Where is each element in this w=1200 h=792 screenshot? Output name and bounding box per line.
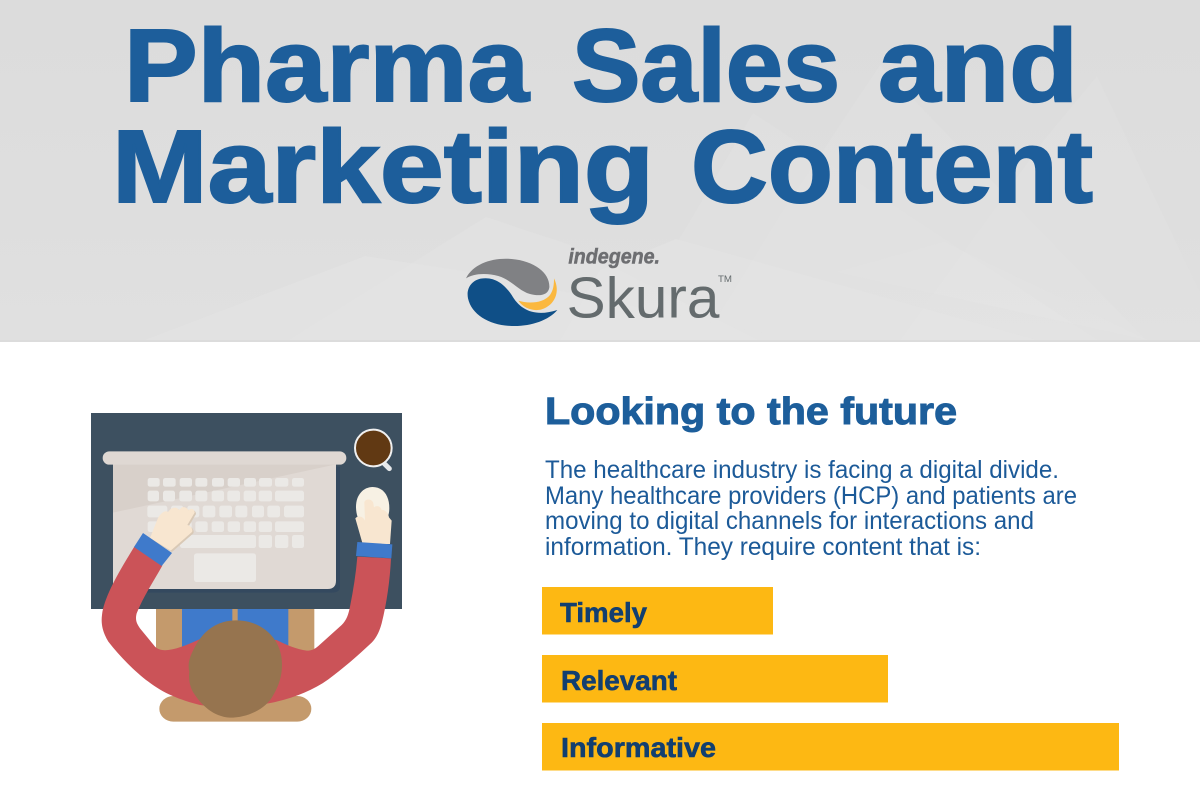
bar: Relevant (542, 655, 888, 702)
logo: indegene Skura (466, 244, 732, 330)
logo swoosh blue (468, 278, 557, 326)
keyboard (147, 478, 304, 548)
chair legs (156, 609, 314, 654)
body text: moving to digital channels for interactions and (545, 507, 1034, 535)
bar: Relevant: Relevant (561, 665, 677, 696)
red sweater arms and torso (102, 547, 391, 707)
right hand (355, 499, 392, 544)
trousers (182, 609, 288, 647)
title (112, 8, 1093, 224)
trackpad (194, 553, 256, 582)
mouse (356, 487, 389, 528)
title: Marketing (112, 109, 654, 224)
bar: Timely: Timely (560, 597, 647, 628)
title: and (878, 8, 1078, 123)
left cuff (134, 533, 172, 566)
head (189, 620, 282, 718)
bar: Timely (542, 587, 773, 634)
header banner (0, 0, 1200, 342)
bar: Informative (542, 723, 1119, 770)
bar: Informative: Informative (561, 732, 716, 763)
body text: information. They require content that is: (545, 533, 981, 561)
logo swoosh yellow (518, 278, 557, 310)
coffee cup (355, 430, 392, 469)
body text: Many healthcare providers (HCP) and patients are (545, 482, 1077, 510)
laptop (103, 451, 346, 593)
right cuff (356, 542, 392, 558)
logo trademark: TM (718, 274, 732, 284)
illustration: person at desk with laptop (91, 413, 402, 722)
logo wordmark Skura: Skura (567, 266, 719, 330)
title: Pharma (124, 8, 530, 123)
desk (91, 413, 402, 609)
body text (545, 456, 1077, 561)
logo wordmark indegene: indegene. (568, 244, 660, 268)
title: Sales (572, 8, 840, 123)
left hand (150, 507, 196, 552)
section heading: Looking to the future (545, 391, 957, 433)
chair seat (159, 696, 311, 722)
title: Content (691, 109, 1093, 224)
logo swoosh grey (466, 259, 549, 295)
body text: The healthcare industry is facing a digital divide. (545, 456, 1059, 484)
